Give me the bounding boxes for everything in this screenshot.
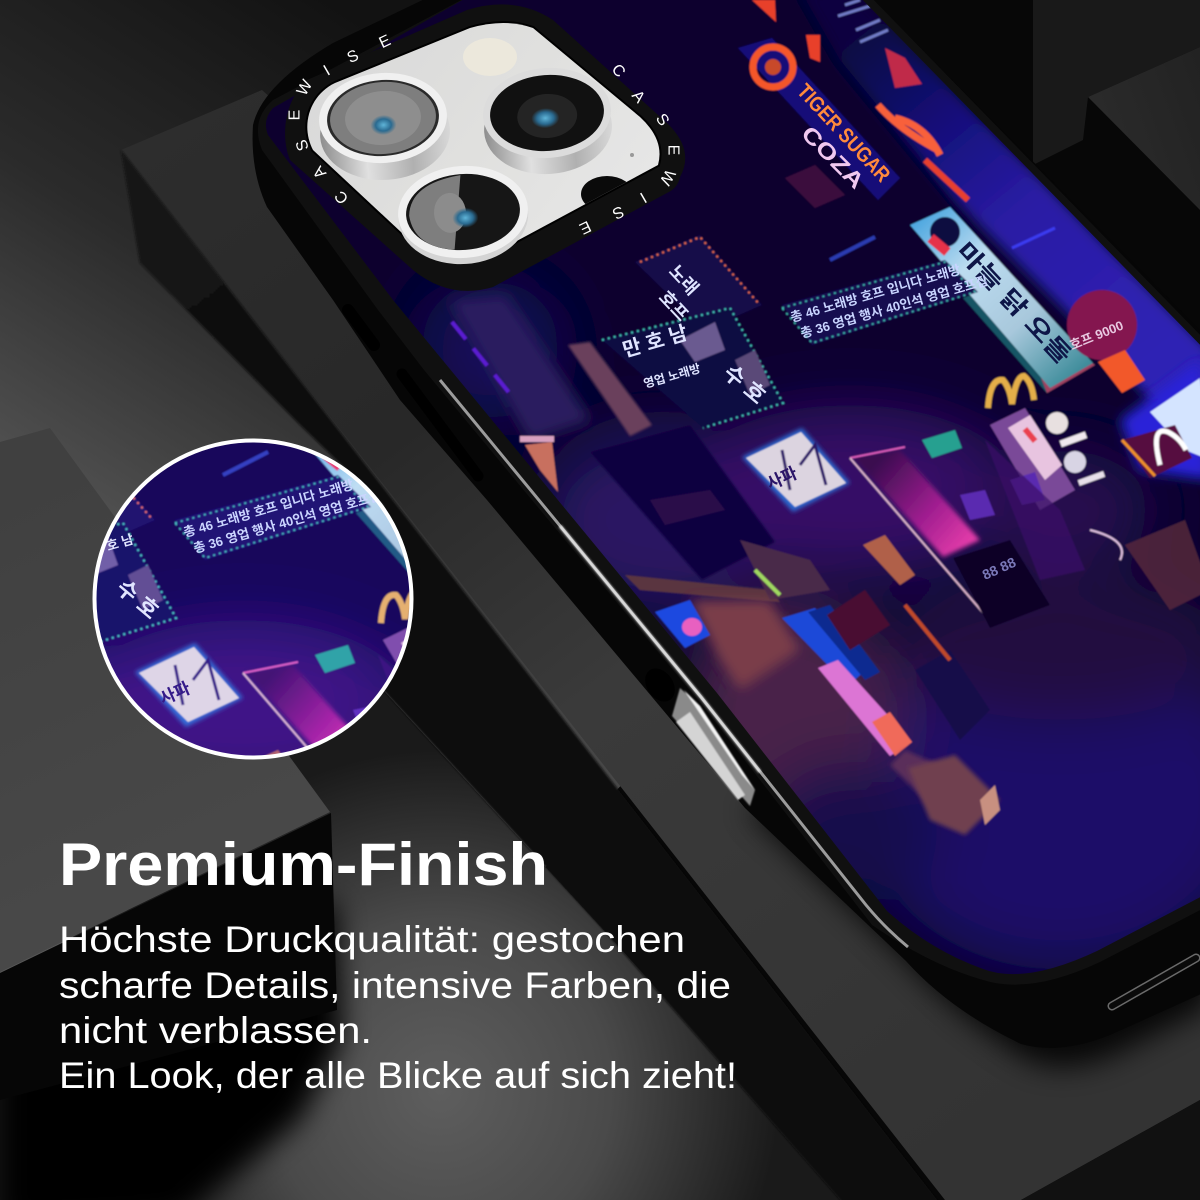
phone shadow: [745, 800, 1200, 1067]
tiger sugar banner: [738, 38, 900, 200]
lens: main: [480, 64, 615, 178]
small block front face: [0, 813, 337, 1012]
white ring: [94, 440, 412, 758]
orange neon tube: [878, 105, 968, 200]
circle text: hangul signs: 수 호: [112, 575, 164, 624]
lower right dark floor: [1021, 1100, 1200, 1200]
sign face: [930, 217, 960, 247]
colour boost overlay: [90, 435, 420, 765]
sign text: upper and central hangul: 호프: [655, 287, 692, 325]
right shop signs: [1125, 520, 1200, 610]
bright edge highlight: [560, 526, 760, 772]
mute switch: [348, 310, 374, 345]
sign text: upper and central hangul: [620, 261, 771, 409]
neon logo circle: [753, 47, 793, 87]
brand lettering left: I: [321, 63, 333, 79]
upper right block top face: [1088, 47, 1200, 210]
colour zones: [240, 0, 1200, 1010]
upper hangul sign: [635, 235, 762, 330]
sign text: upper and central hangul: 수 호: [719, 360, 771, 409]
camera island: [285, 4, 685, 291]
black ring: [285, 4, 685, 291]
brown awning: [625, 575, 780, 602]
brand lettering left: E: [377, 32, 393, 52]
salmon small signs: [863, 535, 915, 585]
orange lit sign: [1098, 350, 1145, 393]
blue grid building: [915, 650, 990, 740]
circle text: hangul signs: 총 36 영업 행사 40인석 영업 호프집: [192, 488, 382, 556]
bright window: [1150, 378, 1200, 460]
floor surface: [0, 0, 620, 973]
brand lettering right: E: [664, 145, 682, 155]
central hangul sign: [602, 308, 783, 428]
small block top face: [0, 428, 330, 972]
body text: scharfe Details, intensive Farben, die: [59, 965, 731, 1006]
orange left sign: [525, 442, 558, 492]
sign text: round sign: 호프 9000: [1068, 318, 1125, 353]
brand lettering left: C: [332, 187, 352, 207]
dark storefront: [953, 540, 1050, 628]
light blue vertical sign: [910, 207, 1093, 388]
brand lettering right: C: [608, 61, 628, 81]
body text: Höchste Druckqualität: gestochen: [59, 919, 685, 960]
sign text: vertical hangul: 마늘 닭 오돌: [951, 238, 1076, 369]
circle text: hangul signs: 만 호 남: [90, 532, 135, 558]
teal wavy sign: [755, 570, 780, 595]
brand lettering left: S: [293, 137, 313, 153]
blue shop signs: [782, 608, 868, 686]
lower floor with soft light: [0, 690, 849, 1200]
magnified artwork: [0, 205, 653, 1200]
sign text: tiger sugar: TIGER SUGAR: [792, 80, 894, 187]
brand lettering right: [577, 61, 682, 237]
body text: Ein Look, der alle Blicke auf sich zieht!: [59, 1055, 737, 1096]
brand lettering right: E: [577, 217, 593, 237]
blue pink neon box: [655, 600, 710, 648]
microphone dot: [630, 153, 634, 157]
heading: Premium-Finish: [59, 831, 548, 898]
blue building hatch: [838, 0, 888, 42]
brand lettering left: A: [310, 162, 330, 181]
brand lettering left: E: [286, 110, 304, 120]
flash: [463, 38, 517, 76]
soft floor shadow: [0, 900, 342, 1200]
shop frame: [850, 447, 905, 458]
body text: [59, 919, 737, 1096]
case body: [253, 0, 1200, 1048]
brand lettering left: W: [294, 76, 317, 99]
circle text: hangul signs: [90, 477, 382, 709]
brand lettering right: S: [610, 202, 626, 222]
sign text: long hangul: 총 36 영업 행사 40인석 영업 호프집: [799, 273, 989, 341]
lens: ultra wide: [316, 69, 453, 184]
upper right block back: [1033, 0, 1200, 165]
sign text: upper and central hangul: 만 호 남: [620, 321, 690, 362]
sign text: upper and central hangul: 노래: [665, 261, 702, 299]
purple neon streak: [452, 322, 515, 400]
dark red panel: [785, 165, 845, 208]
lens: telephoto: [395, 162, 531, 268]
brown shop sign: [827, 590, 890, 650]
brown building stripes: [450, 295, 590, 440]
volume button slot: [402, 374, 478, 476]
cat sign: [742, 428, 850, 512]
grey inset panels: [680, 322, 725, 362]
sign text: upper and central hangul: 영업 노래방: [642, 360, 702, 391]
zoom circle: print detail: [0, 205, 653, 1200]
McDonald's arches: [988, 376, 1034, 408]
sign text: tiger sugar: COZA: [796, 121, 869, 194]
white shop signs: [990, 408, 1075, 510]
orange shop wall: [690, 600, 800, 690]
purple panels: [960, 490, 995, 520]
orange tube signs: [905, 605, 950, 660]
neon accents: [752, 0, 922, 88]
large block front face: [121, 151, 848, 1200]
circle text: hangul signs: 총 46 노래방 호프 입니다 노래방: [182, 477, 355, 540]
neon arch sign: [1122, 425, 1192, 478]
inner ring edge: [307, 23, 660, 258]
bright right band: [796, 0, 1200, 404]
long hangul sign: [782, 260, 978, 345]
phone: case with artwork: [240, 0, 1200, 1048]
teal lower sign panel: [963, 285, 1095, 393]
blue streaks: [830, 237, 875, 260]
silver power button: [672, 688, 755, 806]
body text: nicht verblassen.: [59, 1010, 372, 1051]
brand lettering left: S: [345, 47, 361, 67]
charging port: [1112, 958, 1196, 1006]
magenta shop window: [853, 450, 980, 557]
sign text: dark storefront: 88 88: [980, 554, 1018, 583]
teal sign: [922, 430, 962, 458]
glossy edge highlight: [440, 380, 908, 947]
sign text: long hangul: 총 46 노래방 호프 입니다 노래방: [789, 262, 962, 325]
lidar: [581, 176, 633, 212]
pink shop sign: [818, 660, 912, 756]
brand lettering right: W: [655, 166, 678, 189]
round red sign: [1067, 290, 1137, 360]
brand lettering right: A: [628, 87, 648, 107]
brand lettering right: S: [652, 111, 672, 129]
case rim: [258, 0, 1200, 985]
camera control hole: [639, 663, 681, 707]
sign text: cat sign: 사파: [764, 463, 801, 494]
circle text: hangul signs: 사파: [157, 678, 194, 709]
blue window glow: [1120, 360, 1200, 480]
brand lettering right: I: [637, 189, 649, 205]
sidewalk stalls: [890, 750, 950, 805]
artwork: neon street print: [240, 0, 1200, 1010]
silver window: [307, 23, 660, 258]
black billboard: [590, 425, 775, 580]
brand lettering left: [286, 32, 393, 207]
